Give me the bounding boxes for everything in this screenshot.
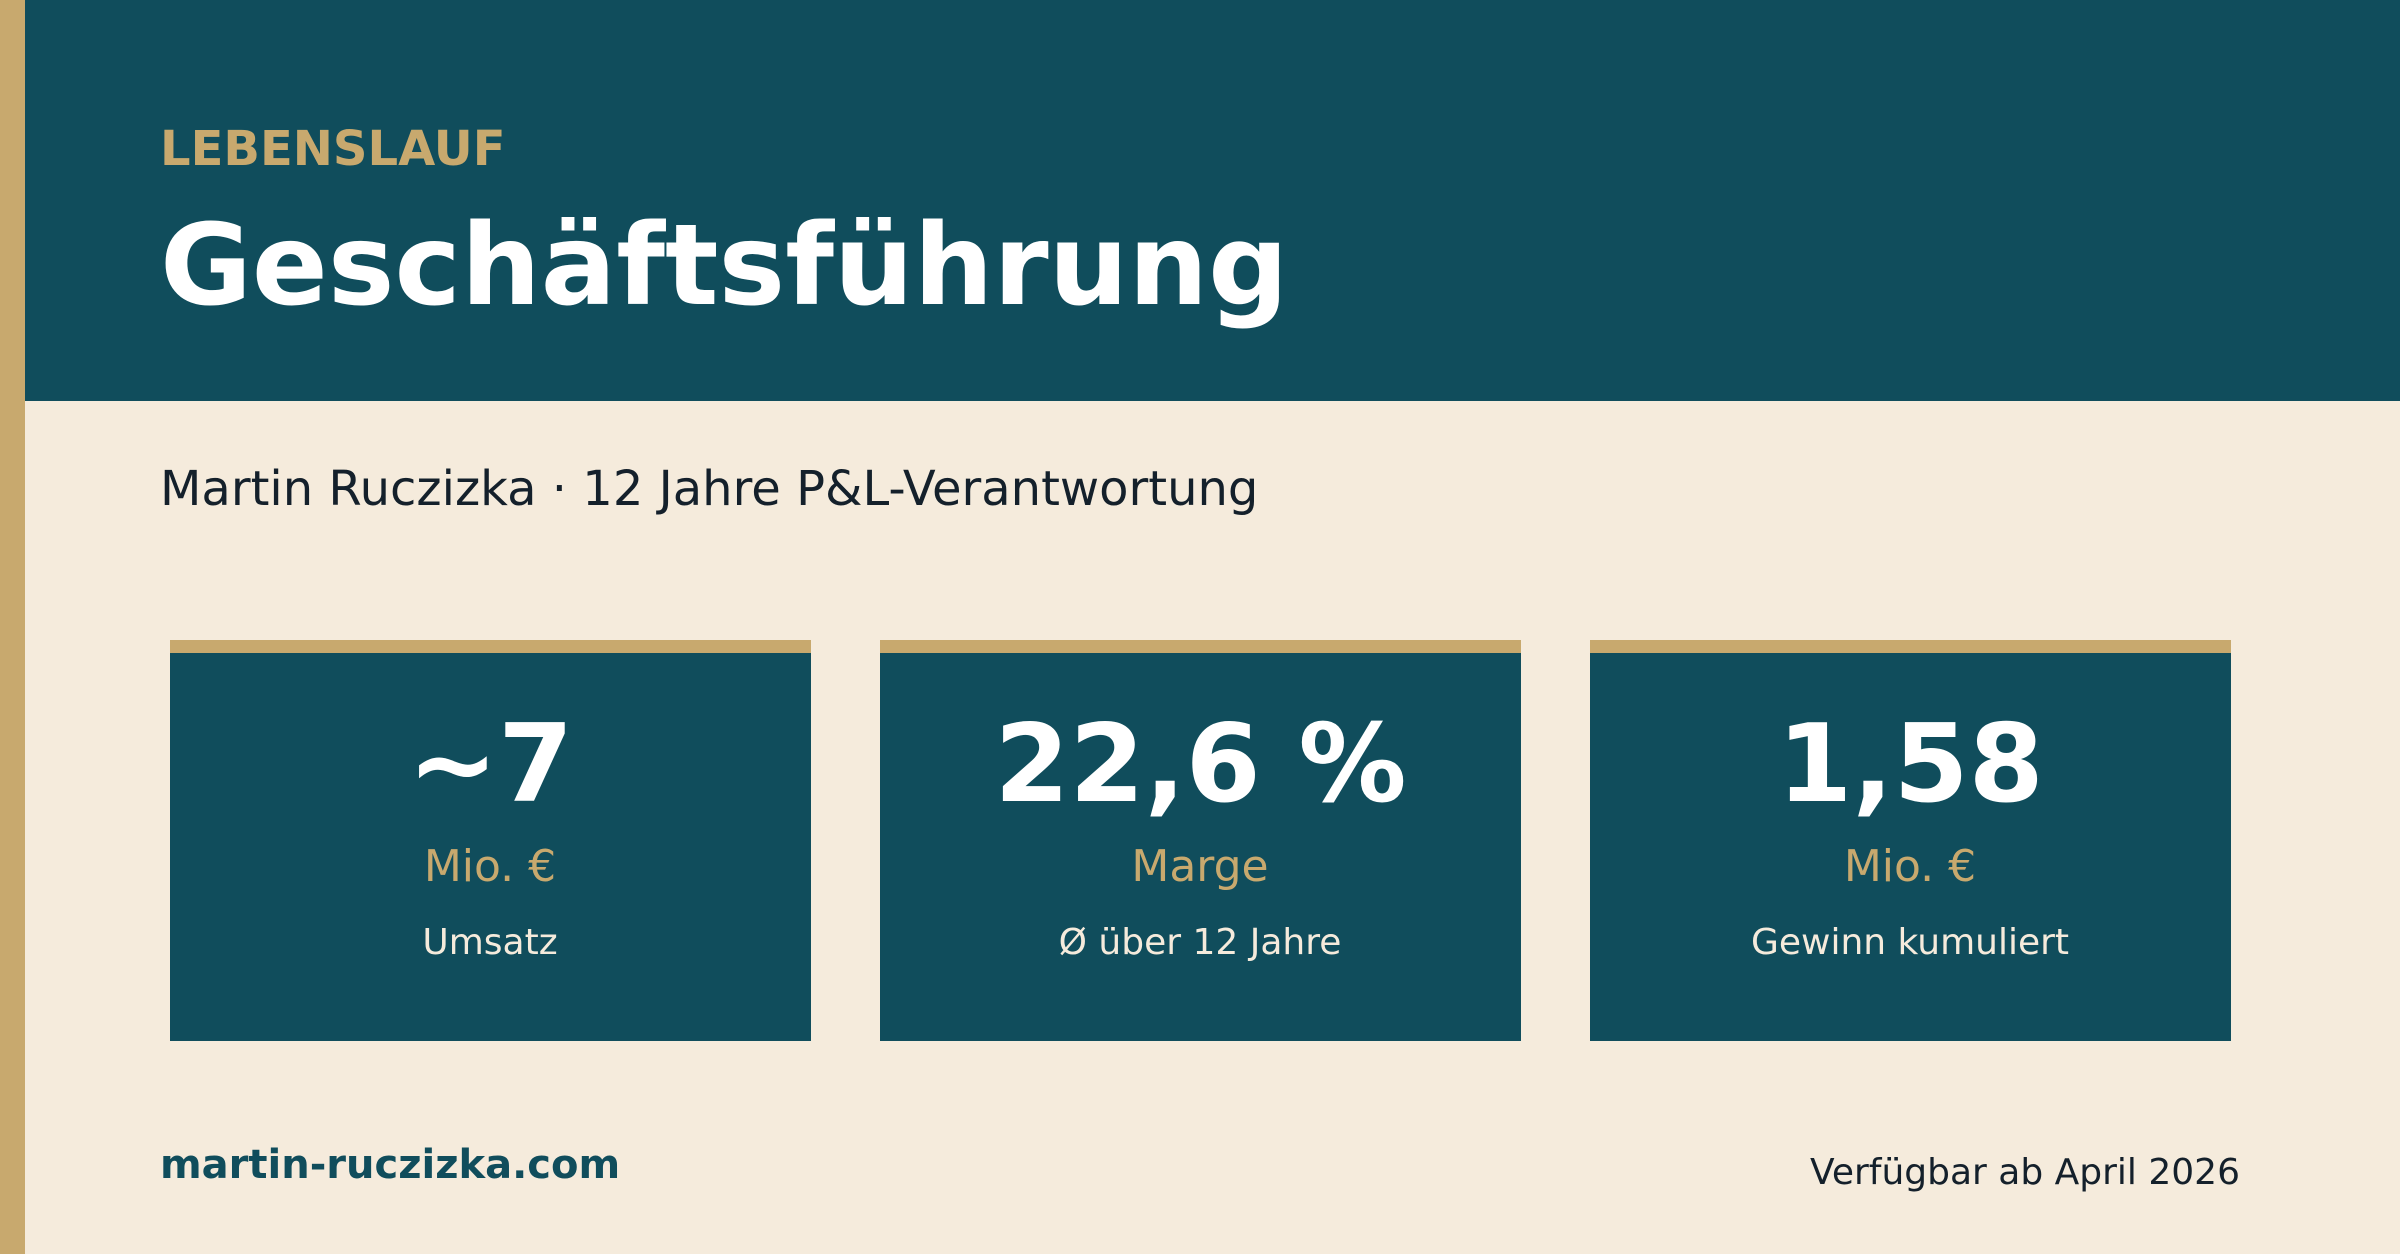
unit: Mio. €: Mio. €: [1844, 841, 1976, 892]
footer: availability: Verfügbar ab April 2026: [1810, 1152, 2240, 1193]
label: Umsatz: Umsatz: [422, 922, 558, 963]
label: Gewinn kumuliert: Gewinn kumuliert: [1751, 922, 2069, 963]
unit: Marge: Marge: [1131, 841, 1269, 892]
subtitle: Martin Ruczizka · 12 Jahre P&L-Verantwortung: [160, 461, 1258, 517]
label: Ø über 12 Jahre: Ø über 12 Jahre: [1059, 922, 1341, 963]
value: ~7: ~7: [408, 702, 573, 827]
title: Geschäftsführung: [160, 201, 1288, 331]
value: 1,58: 1,58: [1777, 702, 2044, 827]
value: 22,6 %: 22,6 %: [994, 702, 1407, 827]
panel: Umsatz: [170, 640, 811, 1041]
panel: Gewinn: [1590, 640, 2231, 1041]
footer: website: martin-ruczizka.com: [160, 1142, 620, 1188]
panel: Marge: [880, 640, 1521, 1041]
unit: Mio. €: Mio. €: [424, 841, 556, 892]
eyebrow: Lebenslauf: LEBENSLAUF: [160, 121, 506, 177]
header band: [0, 0, 2400, 401]
left accent bar: [0, 0, 25, 1254]
